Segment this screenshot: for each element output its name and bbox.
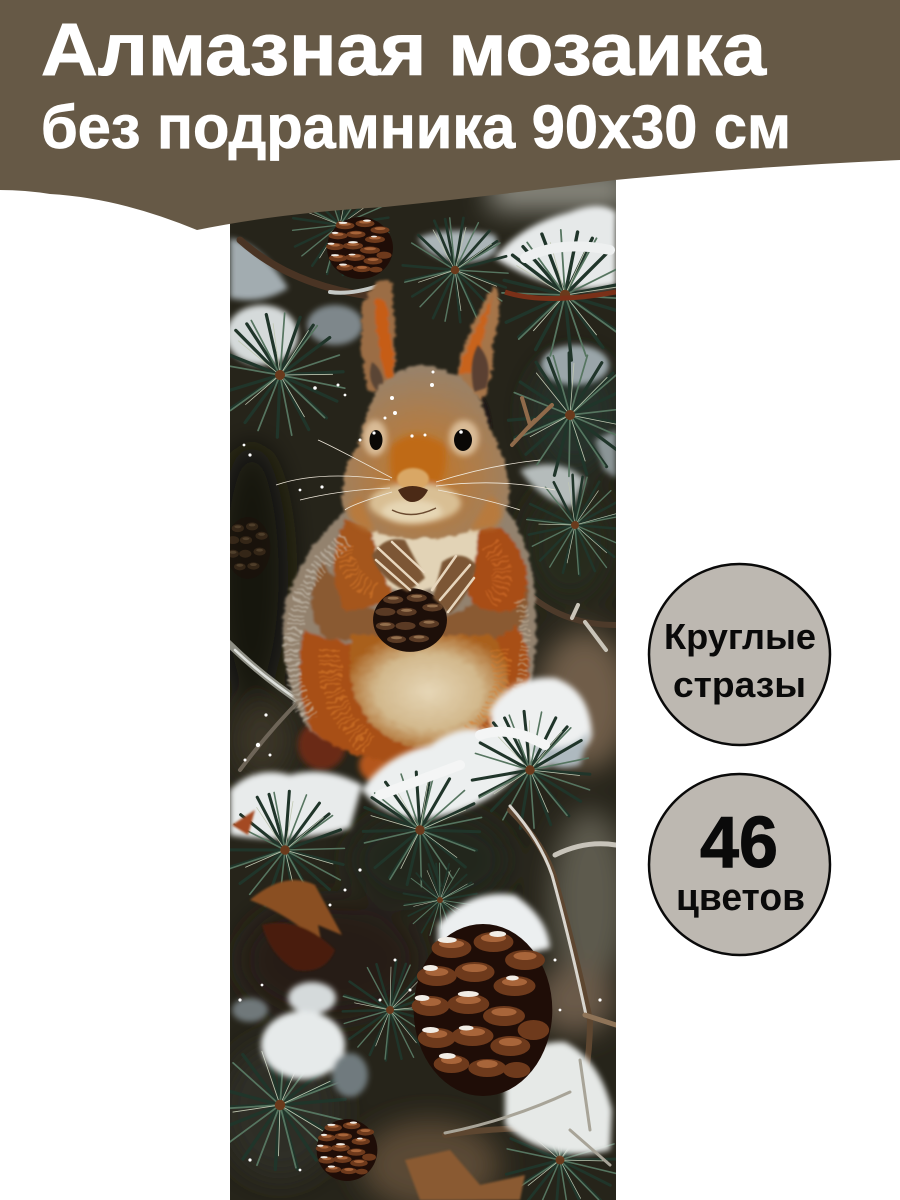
branch lower right [445,806,616,1135]
large pine cone [412,924,552,1096]
panel: squirrel painting [230,180,616,1200]
squirrel body [283,495,537,765]
title line 1: Алмазная мозаика [41,8,767,91]
squirrel inner ears [370,345,492,430]
branch bottom [445,1060,610,1165]
snow piles on lower branches [230,678,592,839]
falling snow specks [238,370,602,1171]
squirrel nose and mouth [392,468,436,515]
squirrel ears [361,281,499,400]
pine cone top [326,217,393,279]
squirrel tail shadow and feet [295,724,394,783]
brown leaves bottom [405,1150,525,1200]
badge: 46 colours: цветов [676,877,805,919]
squirrel head [342,366,509,538]
title line 2: без подрамника 90х30 см [41,93,791,161]
squirrel face markings [349,420,501,532]
badge: round rhinestones: Круглые [664,616,816,657]
squirrel [276,281,555,785]
header banner [0,0,900,230]
branch left of squirrel [230,640,298,772]
squirrel paws [372,539,476,614]
banner shape [0,0,900,230]
badge: round rhinestones [649,564,830,745]
badge: round rhinestones: стразы [673,664,806,705]
badge: 46 colours: 46 [700,803,778,883]
pine sprig upper left [230,207,390,439]
pine sprigs lower [230,710,616,1200]
squirrel eyes [370,429,472,451]
small pine cone bottom [316,1119,377,1181]
squirrel fur edges [292,540,525,745]
branch upper left [240,240,378,296]
badge: 46 colours [649,774,830,955]
pine cone left shadow [230,522,268,570]
dead leaves [232,810,342,971]
snow lower clumps [232,894,612,1154]
snow on upper branches [226,206,616,508]
squirrel whiskers [276,440,555,510]
painting background colour masses [216,170,633,1200]
branch right of squirrel [530,595,616,650]
cone held by squirrel [373,588,447,652]
pine sprig upper right [402,216,616,576]
